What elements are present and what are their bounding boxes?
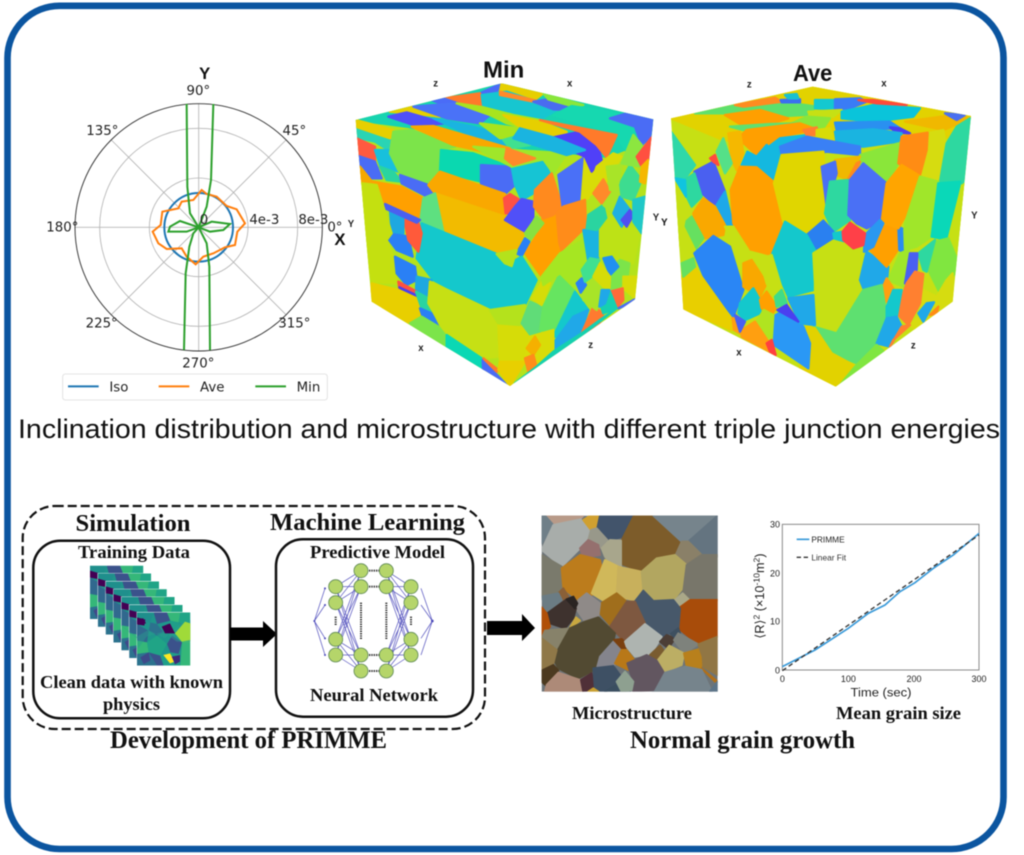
main caption: Inclination distribution and microstructure with different triple junction energies (18, 414, 1000, 444)
text: Training Data: Training Data (78, 542, 190, 562)
Iso curve (164, 193, 233, 262)
x tick labels: 300 (971, 674, 986, 684)
cube axis labels: x (736, 347, 742, 358)
line chart: mean grain size (751, 520, 986, 700)
neural network diagram (313, 564, 434, 678)
x tick labels: 100 (841, 674, 856, 684)
legend (63, 374, 327, 400)
cube axis labels: Y (653, 212, 660, 223)
angle label 135: 135° (86, 124, 118, 139)
chart legend (797, 534, 847, 562)
radial label 4e-3: 4e-3 (249, 213, 279, 228)
cube axis labels: z (747, 79, 752, 90)
panel: training data box (33, 541, 230, 718)
PRIMME curve (782, 533, 979, 667)
text: Microstructure: Microstructure (572, 703, 692, 723)
legend: Iso (109, 380, 128, 395)
angle label 0: 0° (327, 221, 342, 236)
heading: Normal grain growth: Normal grain growth (630, 727, 855, 754)
text: Clean data with known physics: Clean data with known (40, 672, 223, 692)
y axis title: m (753, 562, 767, 573)
cube axis labels: x (881, 79, 887, 90)
text: Clean data with known physics (40, 672, 223, 714)
text: Predictive Model: Predictive Model (310, 542, 445, 562)
angle label 45: 45° (283, 124, 306, 139)
y axis title: 2 (751, 557, 761, 562)
cube axis labels (348, 79, 668, 354)
Ave title: Ave (793, 60, 832, 86)
Ave curve (153, 190, 245, 264)
polar grid (75, 104, 322, 351)
chart legend: PRIMME (811, 534, 845, 544)
cube axis labels: z (588, 340, 593, 351)
y tick labels: 0 (775, 665, 780, 675)
Min grains (354, 82, 654, 387)
panel: machine learning box (276, 539, 473, 717)
chart legend: Linear Fit (811, 552, 847, 562)
text: Clean data with known physics: physics (103, 694, 160, 714)
heading: Machine Learning: Machine Learning (270, 510, 465, 536)
legend: Ave (200, 380, 224, 395)
x tick labels (780, 674, 986, 684)
cube axis labels (661, 79, 978, 358)
y axis title: 2 (751, 615, 761, 620)
image stack: training frames (90, 566, 190, 666)
radial label 0: 0 (200, 213, 208, 228)
y tick labels (770, 520, 780, 675)
linear fit (782, 535, 979, 671)
y tick labels: 10 (770, 617, 780, 627)
y axis title: (×10 (753, 586, 767, 615)
angle label 180: 180° (46, 221, 78, 236)
heading: Simulation: Simulation (76, 511, 190, 537)
heading: Development of PRIMME: Development of PRIMME (110, 727, 387, 754)
arrow: simulation to machine learning (230, 621, 277, 647)
Ave grains (670, 86, 972, 388)
cube axis labels: Y (661, 217, 668, 228)
y tick labels: 20 (770, 568, 780, 578)
cube axis labels: Y (348, 219, 355, 230)
axis label X: X (334, 230, 346, 249)
y tick labels: 30 (770, 520, 780, 530)
cube: Ave (660, 50, 1000, 410)
Min title: Min (483, 56, 524, 82)
x tick labels: 0 (780, 674, 785, 684)
polar chart (46, 64, 346, 400)
axis label Y: Y (199, 64, 210, 83)
cube axis labels: z (911, 341, 916, 352)
cube axis labels: Y (661, 217, 668, 228)
cube axis labels: x (567, 79, 573, 90)
Min curve (168, 104, 230, 350)
microstructure image (542, 516, 718, 692)
polar outer frame (75, 104, 322, 351)
cube axis labels: x (418, 343, 424, 354)
cube: Min (340, 50, 680, 410)
cube axis labels: z (433, 79, 438, 90)
legend: Min (297, 380, 320, 395)
x tick labels: 200 (906, 674, 921, 684)
y axis title: -10 (751, 573, 761, 586)
text: Mean grain size: Mean grain size (836, 703, 961, 723)
angle label 90: 90° (187, 84, 210, 99)
y axis title: ) (753, 553, 767, 558)
x axis title: Time (sec) (850, 686, 911, 700)
angle label 270: 270° (182, 357, 214, 372)
cube axis labels: Y (971, 211, 978, 222)
y axis title: ⟨R⟩ (753, 620, 767, 639)
angle label 315: 315° (278, 317, 310, 332)
angle label 225: 225° (86, 317, 118, 332)
panel: development of PRIMME dashed frame (23, 506, 485, 729)
text: Neural Network: Neural Network (310, 685, 438, 705)
radial label 8e-3: 8e-3 (298, 213, 328, 228)
arrow: PRIMME to normal grain growth (487, 614, 535, 641)
